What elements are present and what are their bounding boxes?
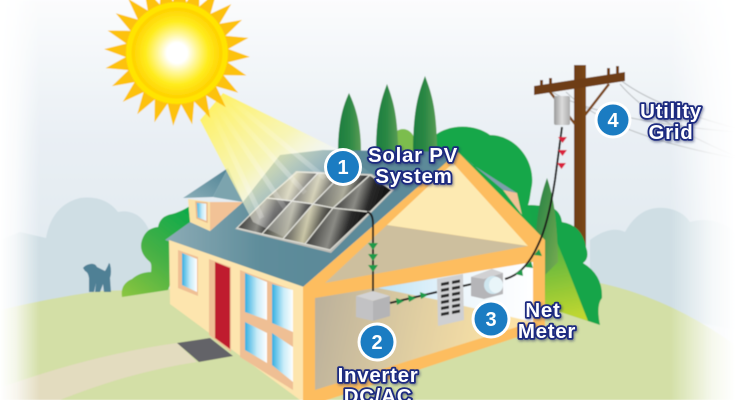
dormer side bbox=[210, 202, 243, 231]
sun bbox=[104, 0, 250, 126]
left bush bbox=[122, 206, 190, 297]
attic interior tan bbox=[325, 225, 528, 283]
grid wire bbox=[505, 127, 567, 279]
label 3: Net bbox=[525, 299, 561, 322]
label 1: Solar PV bbox=[368, 144, 458, 167]
solar panel cells bbox=[237, 172, 392, 250]
label 4: Utility bbox=[640, 100, 702, 123]
window panes bbox=[245, 273, 293, 382]
wire panel to meter bbox=[463, 284, 472, 286]
brace bbox=[550, 84, 609, 124]
front wall bbox=[169, 240, 304, 400]
sunlight beam bbox=[200, 93, 378, 245]
callout 3: Net Meter: Meter bbox=[518, 320, 576, 343]
red arrows bbox=[557, 137, 567, 169]
cypress trees bbox=[338, 76, 437, 152]
dormer wall bbox=[188, 199, 210, 231]
lower room floor bbox=[315, 262, 533, 390]
dormer roof left bbox=[183, 168, 228, 198]
beam rays bbox=[212, 98, 325, 218]
overhead wires bbox=[552, 78, 735, 158]
dog silhouette bbox=[83, 263, 111, 292]
callout 3: Net Meter bbox=[472, 299, 576, 343]
house bbox=[165, 150, 545, 400]
right bush bbox=[530, 205, 602, 325]
transformer bbox=[554, 96, 570, 125]
callout 1: Solar PV System: System bbox=[375, 165, 453, 188]
distant tree silhouettes bbox=[0, 198, 735, 330]
bush light face bbox=[545, 215, 588, 321]
net meter bbox=[471, 269, 503, 299]
DC wire from panel bbox=[367, 212, 378, 295]
red door bbox=[215, 262, 230, 349]
inverter box bbox=[356, 291, 390, 321]
utility pole bbox=[534, 65, 735, 255]
callout 2: Inverter DC/AC bbox=[338, 322, 418, 400]
house frame bbox=[303, 152, 545, 400]
small window glass bbox=[182, 253, 197, 292]
dormer window bbox=[196, 202, 207, 222]
label 2: Inverter bbox=[338, 364, 418, 387]
garden path bbox=[0, 343, 197, 400]
dormer roof right bbox=[213, 168, 243, 202]
right hill bbox=[300, 283, 735, 400]
badge 2: 2 bbox=[371, 332, 383, 354]
badge 4: 4 bbox=[607, 110, 619, 132]
right roof section bbox=[458, 152, 517, 193]
AC wire to panel bbox=[390, 292, 437, 305]
main roof bbox=[165, 150, 458, 287]
badge 1: 1 bbox=[337, 157, 349, 179]
pole post bbox=[574, 65, 586, 255]
small window bbox=[178, 250, 198, 296]
door frame bbox=[209, 259, 231, 352]
breaker panel bbox=[437, 274, 464, 326]
callout 1: Solar PV System bbox=[324, 144, 458, 188]
back green bush bbox=[425, 127, 546, 262]
beam glow bbox=[200, 93, 378, 245]
green arrows bbox=[368, 243, 378, 272]
insulators bbox=[540, 66, 619, 88]
green arrows bbox=[515, 249, 542, 276]
right roof wall bbox=[503, 190, 522, 215]
large windows frame bbox=[240, 270, 293, 390]
tree beside house bbox=[535, 178, 558, 275]
badge 3: 3 bbox=[485, 309, 497, 331]
left hill bbox=[0, 288, 330, 400]
callout 4: Utility Grid bbox=[594, 100, 702, 144]
light bush between trees bbox=[391, 129, 415, 157]
doormat bbox=[177, 338, 233, 362]
solar panel frame bbox=[235, 171, 394, 253]
sun disc bbox=[126, 2, 228, 104]
callout 4: Utility Grid: Grid bbox=[649, 121, 693, 144]
back room wall bbox=[378, 262, 533, 322]
crossarm bbox=[534, 72, 625, 95]
attic interior yellow bbox=[387, 163, 528, 246]
sun rays bbox=[104, 0, 250, 126]
